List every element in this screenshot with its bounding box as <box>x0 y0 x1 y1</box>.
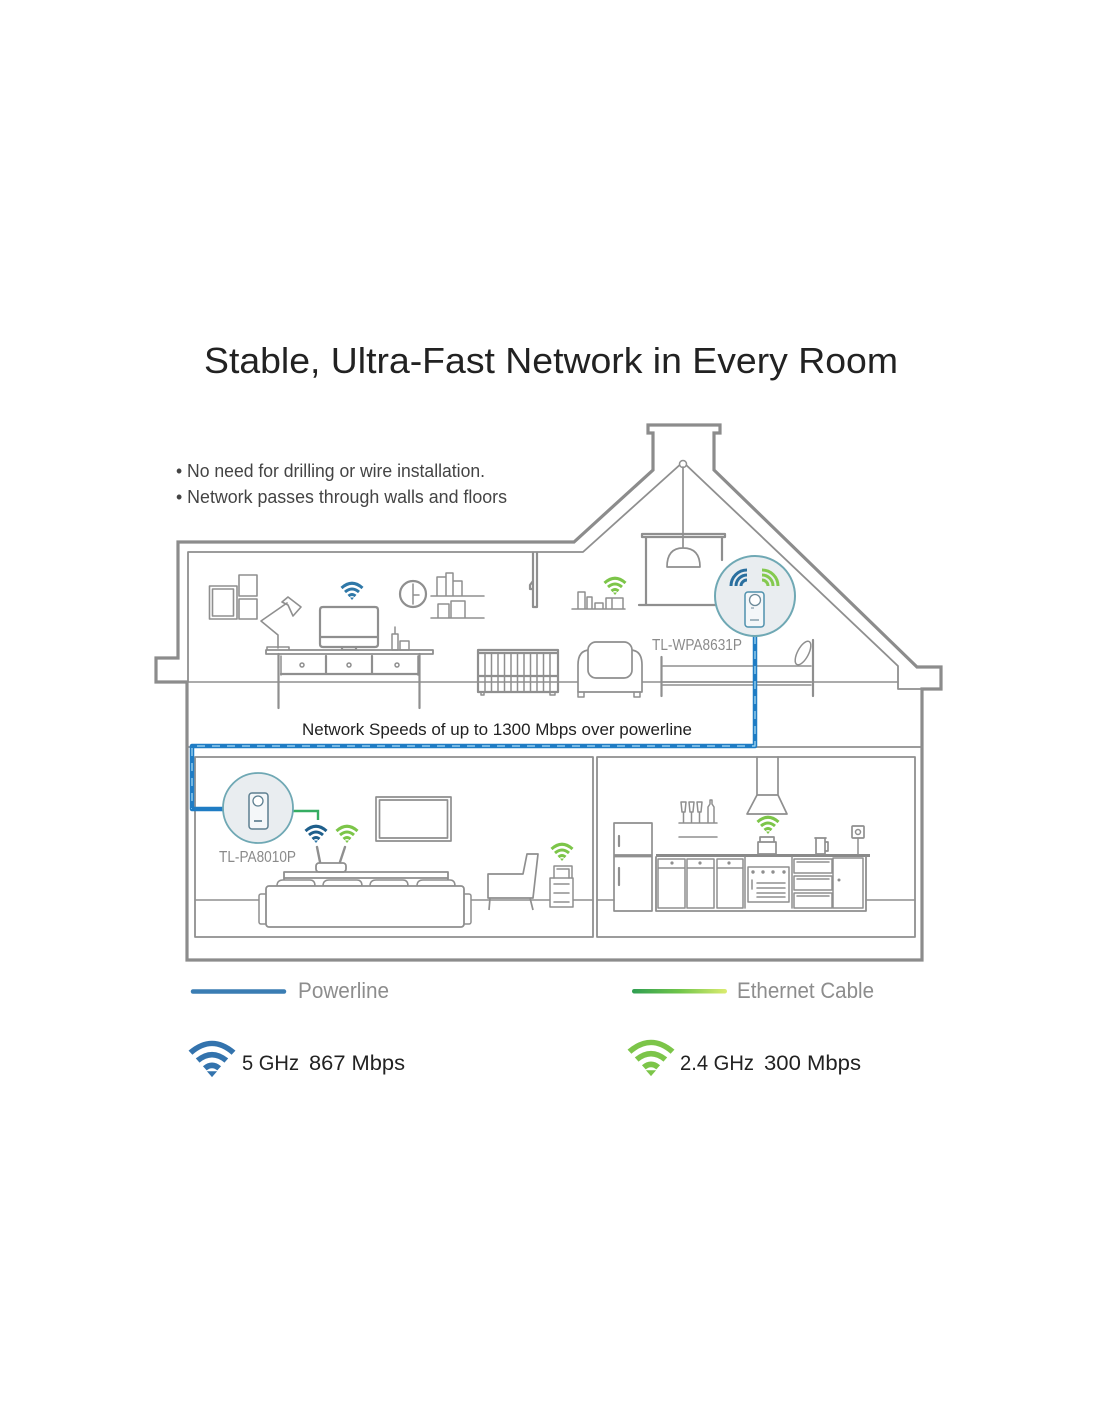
badge circle <box>223 773 293 843</box>
kitchen <box>614 757 870 911</box>
monitor <box>320 607 378 650</box>
side chair <box>488 854 538 910</box>
green wifi fan <box>762 570 778 586</box>
sofa <box>259 872 471 927</box>
upstairs office furniture <box>210 467 814 708</box>
legend: 5 GHz <box>190 1043 405 1077</box>
bullet list: • Network passes through walls and floors <box>176 487 507 507</box>
kitchen shelves with glasses and bottle <box>679 800 717 837</box>
adapter device <box>249 793 268 829</box>
title: Stable, Ultra-Fast Network in Every Room <box>204 340 898 381</box>
fridge <box>614 823 652 911</box>
2.4 GHz label <box>680 1051 861 1075</box>
oven <box>748 867 789 902</box>
desk <box>266 650 433 708</box>
upper floor line <box>188 681 898 683</box>
wifi icon: 5 GHz legend <box>190 1043 234 1077</box>
wifi icon: router 5 GHz <box>306 826 326 843</box>
powerline label: Powerline <box>298 978 389 1003</box>
wall shelves with books <box>431 573 484 618</box>
corner cabinet <box>833 858 863 908</box>
router <box>316 847 346 872</box>
kettle <box>815 838 828 854</box>
picture frames <box>210 575 257 619</box>
badge circle <box>715 556 795 636</box>
wall socket <box>852 826 864 854</box>
armchair <box>578 642 642 697</box>
attic inner outline <box>188 462 922 689</box>
side table with laptop <box>550 866 573 907</box>
speed caption: Network Speeds of up to 1300 Mbps over powerline <box>302 721 692 739</box>
wifi icon: 2.4 GHz legend <box>629 1042 673 1076</box>
radiator <box>478 650 558 695</box>
door edge <box>530 553 537 607</box>
wifi icon: side table <box>552 844 572 861</box>
bullet list: • No need for drilling or wire installation. <box>176 461 485 481</box>
blue wifi fan <box>731 570 747 586</box>
powerline swatch <box>193 989 284 994</box>
ethernet label: Ethernet Cable <box>737 978 874 1003</box>
house outer wall <box>156 425 941 960</box>
pendant light <box>667 467 700 567</box>
toaster <box>758 837 776 854</box>
adapter badge: TL-PA8010P <box>223 773 293 843</box>
apex joint <box>680 460 686 468</box>
bed <box>662 639 814 696</box>
range hood <box>747 757 787 814</box>
living room furniture <box>259 797 573 927</box>
5 GHz label: 867 Mbps <box>309 1051 405 1075</box>
extender device <box>745 592 764 627</box>
2.4 GHz label: 2.4 GHz <box>680 1051 754 1075</box>
extender badge: TL-WPA8631P <box>715 556 795 636</box>
label: TL-WPA8631P: TL-WPA8631P <box>652 637 742 654</box>
ethernet cable to router <box>293 811 318 820</box>
bullet list <box>176 461 507 507</box>
wifi icon: 5 GHz desk <box>342 583 362 600</box>
cabinets <box>656 857 866 911</box>
drawers <box>794 859 832 908</box>
fridge handles <box>618 836 620 885</box>
5 GHz label: 5 GHz <box>242 1051 299 1075</box>
dormer frame <box>639 534 725 605</box>
ceiling line of the lower floor <box>187 746 922 748</box>
lower room outlines <box>195 757 915 937</box>
wifi icon: 2.4 GHz shelf <box>604 578 626 595</box>
label: TL-PA8010P: TL-PA8010P <box>219 849 296 866</box>
house structure <box>156 425 941 960</box>
wifi icon: router 2.4 GHz <box>336 826 358 843</box>
wall tv <box>376 797 451 841</box>
5 GHz label <box>242 1051 405 1075</box>
ethernet swatch <box>632 989 727 994</box>
countertop <box>656 854 870 857</box>
2.4 GHz label: 300 Mbps <box>764 1051 861 1075</box>
clock <box>400 581 426 607</box>
legend: 2.4 GHz <box>629 1042 861 1076</box>
wifi icon: kitchen <box>758 817 778 834</box>
desk lamp <box>261 597 301 650</box>
lower floor lines <box>195 899 915 901</box>
small shelf with books <box>572 592 625 609</box>
legend: ethernet cable <box>632 978 874 1003</box>
powerline cable <box>192 636 755 809</box>
pen cup and mug <box>392 627 409 650</box>
